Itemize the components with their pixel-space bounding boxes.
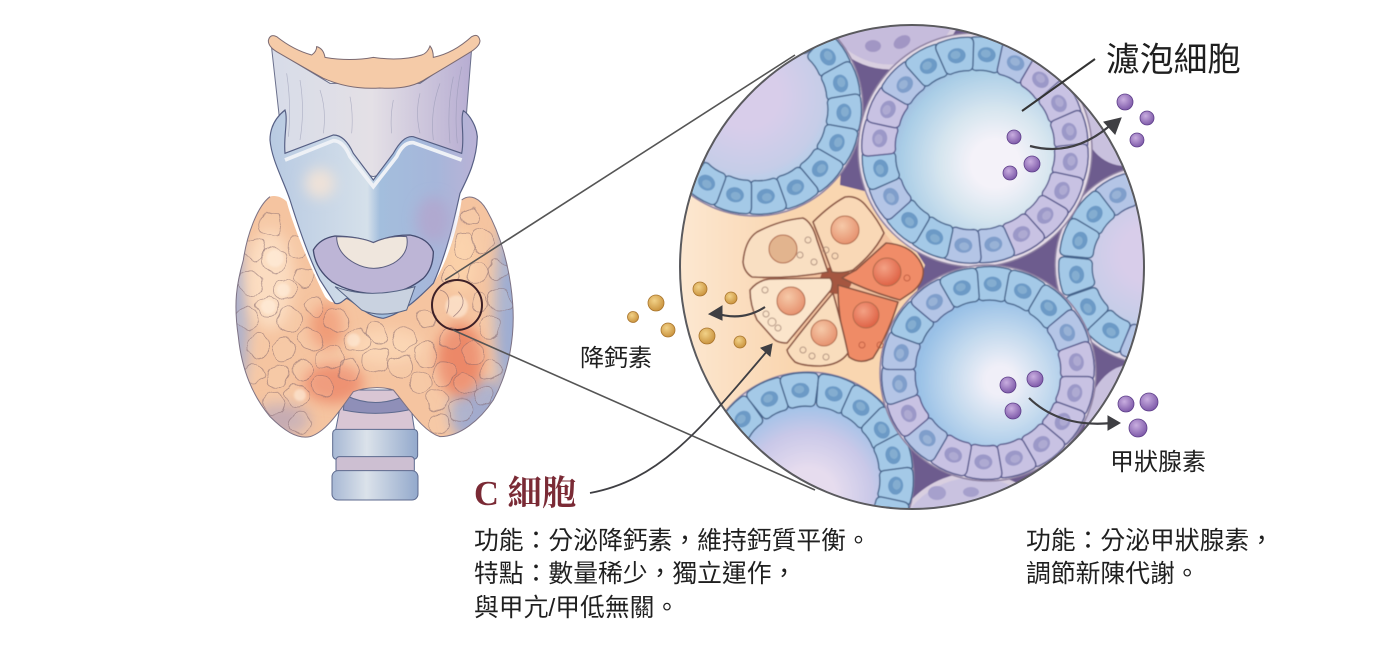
magnifier circle on thyroid xyxy=(432,280,482,330)
illustration: thyroid anatomy xyxy=(235,34,514,500)
text: follicular cell description: 調節新陳代謝。 xyxy=(1026,560,1200,588)
follicle: lower right xyxy=(880,265,1096,481)
arrow: C cell pointer xyxy=(590,344,772,493)
circled lobule xyxy=(440,290,463,317)
dots: thyroid hormone lower xyxy=(1000,371,1158,437)
upper membrane xyxy=(272,48,472,177)
connector lines xyxy=(445,55,815,490)
label: follicular cell: 濾泡細胞 xyxy=(1106,41,1241,79)
C cell cluster xyxy=(743,197,923,366)
text: C cell description: 功能：分泌降鈣素，維持鈣質平衡。 xyxy=(474,527,871,555)
text: follicular cell description: 功能：分泌甲狀腺素， xyxy=(1026,527,1274,555)
heading: C cell: C 細胞 xyxy=(474,475,577,513)
arrow: calcitonin release xyxy=(709,306,765,320)
follicle: right xyxy=(1054,169,1143,362)
leader: follicle cell xyxy=(1022,59,1095,111)
follicle: lower left xyxy=(726,370,915,508)
thyroid cartilage shield xyxy=(270,110,477,318)
trachea under larynx xyxy=(323,277,427,318)
peach blush xyxy=(305,168,335,198)
text: C cell description: 特點：數量稀少，獨立運作， xyxy=(474,560,796,588)
interstitial tissue xyxy=(840,30,1125,499)
peach background xyxy=(681,175,926,410)
highlighted lobules xyxy=(261,250,468,401)
thyroid gland xyxy=(236,196,513,437)
arrow: follicle secretion upper xyxy=(1030,118,1121,149)
follicle: upper right xyxy=(858,33,1092,267)
hyoid top xyxy=(268,35,480,88)
arrow: follicle secretion lower xyxy=(1029,398,1120,430)
follicle: bottom purple xyxy=(910,475,1016,508)
lobules xyxy=(235,207,510,434)
dots: thyroid hormone upper xyxy=(1003,94,1154,180)
dots: calcitonin xyxy=(628,282,746,348)
C cell granules xyxy=(762,237,910,360)
label: thyroid hormone: 甲狀腺素 xyxy=(1110,449,1206,476)
lower trachea xyxy=(332,390,418,500)
cricoid lower xyxy=(335,287,415,314)
text: C cell description xyxy=(474,527,871,622)
lens outline xyxy=(680,25,1144,509)
C cell nuclei xyxy=(769,216,901,346)
inner opening xyxy=(337,236,407,268)
panel: magnified tissue xyxy=(681,26,1143,508)
cricoid arch xyxy=(313,235,433,294)
follicle: upper left xyxy=(691,38,864,218)
follicle: top purple xyxy=(838,26,956,70)
text: C cell description: 與甲亢/甲低無關。 xyxy=(474,594,679,622)
membrane streaks xyxy=(287,67,462,143)
label: calcitonin: 降鈣素 xyxy=(580,345,652,372)
notch highlight xyxy=(285,141,462,187)
text: follicular cell description xyxy=(1026,527,1274,588)
